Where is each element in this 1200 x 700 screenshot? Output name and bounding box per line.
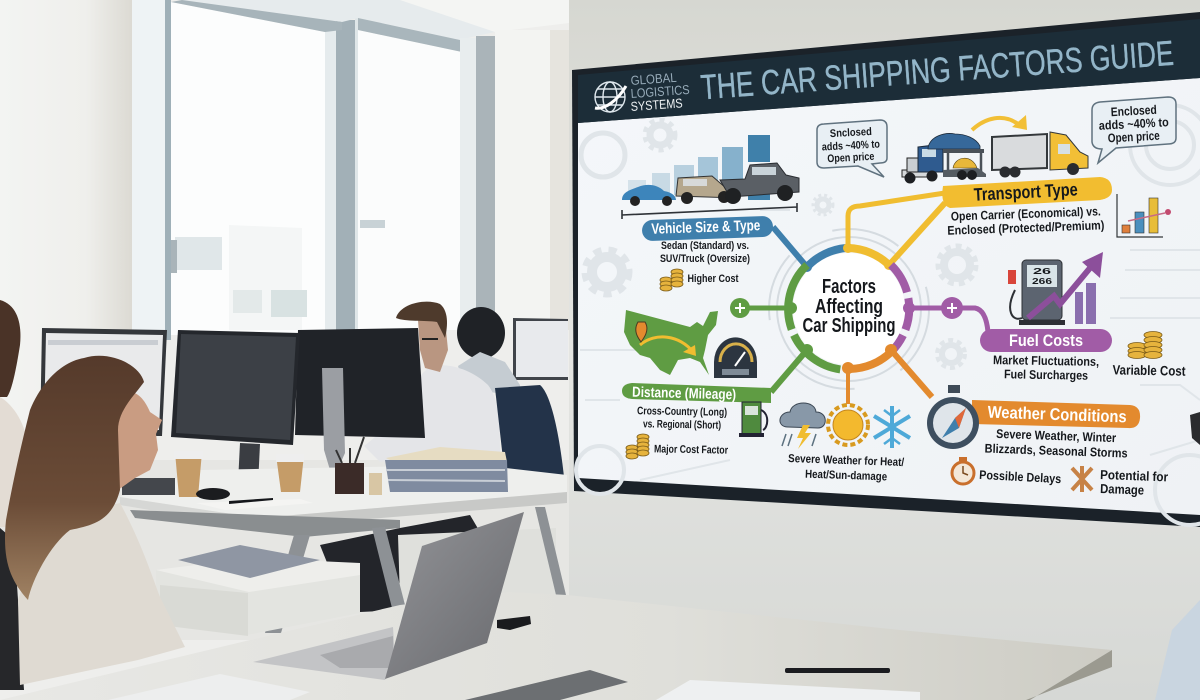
weather icons: Severe Weather for Heat/ xyxy=(788,453,905,469)
coffee cup 2 xyxy=(276,454,304,492)
stack of files xyxy=(385,447,508,492)
hub title xyxy=(802,276,896,337)
icon: speedometer xyxy=(714,337,757,378)
connector: orange xyxy=(842,344,932,404)
header logo: GLOBAL xyxy=(630,70,677,88)
weather conditions panel xyxy=(972,400,1140,460)
icon: globe logo xyxy=(595,82,626,112)
fuel costs panel: Variable Cost xyxy=(1112,362,1186,379)
laptop xyxy=(253,512,524,680)
header band xyxy=(578,19,1200,123)
speech bubble: right xyxy=(1092,97,1176,163)
plus node: green xyxy=(730,298,750,318)
possible delays: Possible Delays xyxy=(979,468,1062,486)
connector: purple xyxy=(891,265,988,352)
icon: beige SUV xyxy=(676,176,737,204)
speech bubble: right: Enclosed xyxy=(1110,103,1157,119)
icon: compass stopwatch xyxy=(927,385,979,449)
paper and pen xyxy=(196,498,313,510)
icon: coins xyxy=(1128,332,1162,358)
pen on desk xyxy=(785,668,890,673)
hub title: Car Shipping xyxy=(802,315,896,337)
central monitor left xyxy=(171,330,300,485)
fuel costs panel: Fuel Costs xyxy=(1009,331,1083,350)
central monitor right xyxy=(295,328,425,480)
transport type panel: Transport Type xyxy=(973,179,1078,205)
weather icons: Heat/Sun-damage xyxy=(805,469,887,483)
connector: green xyxy=(740,265,846,392)
icon: fuel pump and rising arrow xyxy=(1008,252,1103,325)
right back monitor xyxy=(513,318,568,380)
connector: blue xyxy=(773,227,846,272)
face xyxy=(118,392,162,490)
wall TV screen xyxy=(572,12,1200,527)
speech bubble: right: adds ~40% to xyxy=(1098,115,1169,133)
desk xyxy=(120,465,567,633)
icon: car carrier truck xyxy=(902,134,986,184)
speech bubble: right: Open price xyxy=(1107,129,1160,145)
display xyxy=(578,78,1200,515)
hub title: Factors xyxy=(822,276,876,298)
blouse xyxy=(18,503,185,685)
fuel costs panel xyxy=(980,329,1186,383)
icon: coins xyxy=(660,269,683,291)
decorative rings xyxy=(769,229,929,389)
icon: green fuel pump xyxy=(739,402,767,437)
vehicle size bars xyxy=(628,135,770,200)
header logo: LOGISTICS xyxy=(630,82,690,101)
header logo xyxy=(595,70,690,114)
mouse xyxy=(196,488,230,500)
foreground desk xyxy=(0,592,1112,700)
small bar chart xyxy=(1117,194,1171,237)
header logo: SYSTEMS xyxy=(630,95,683,114)
icon: fuel pump and rising arrow: 26 xyxy=(1033,266,1051,276)
left woman xyxy=(0,300,28,527)
icon: storm cloud xyxy=(780,403,825,449)
fuel costs panel: Market Fluctuations, xyxy=(993,353,1099,369)
chair xyxy=(0,528,24,690)
coffee cup 1 xyxy=(174,451,203,497)
small cup xyxy=(369,473,382,495)
foreground woman xyxy=(5,356,185,685)
back office scene xyxy=(0,302,569,640)
pen cup xyxy=(335,437,364,494)
weather conditions panel: Blizzards, Seasonal Storms xyxy=(984,442,1128,460)
icon: damage cross xyxy=(1072,466,1092,492)
man at desk xyxy=(364,302,500,462)
transport type panel: Open Carrier (Economical) vs. xyxy=(951,204,1101,224)
potential for damage xyxy=(1100,467,1168,498)
icon: pickup truck xyxy=(720,163,799,204)
transport type panel: Enclosed (Protected/Premium) xyxy=(947,218,1105,238)
vehicle size panel xyxy=(642,216,773,291)
icon: US map with route xyxy=(624,310,718,375)
centre hub xyxy=(740,193,988,404)
icon: fuel pump and rising arrow: 266 xyxy=(1032,276,1052,286)
pill xyxy=(642,216,773,241)
long hair xyxy=(5,356,144,600)
vehicle size panel: SUV/Truck (Oversize) xyxy=(660,253,750,265)
weather icons xyxy=(780,403,910,483)
right under-desk cabinet xyxy=(398,528,556,600)
hub title: Affecting xyxy=(815,296,883,318)
filing cabinet xyxy=(156,545,360,636)
speech bubble: left: adds ~40% to xyxy=(822,138,880,154)
icon: blue sedan xyxy=(622,185,676,206)
person at right edge xyxy=(1155,412,1200,700)
bezel xyxy=(572,12,1200,527)
distance panel: Distance (Mileage) xyxy=(632,385,736,403)
weather conditions panel: Weather Conditions xyxy=(987,403,1127,426)
connector: yellow xyxy=(843,193,945,270)
icon: enclosed box truck xyxy=(992,132,1088,178)
vehicle size panel: Sedan (Standard) vs. xyxy=(661,240,749,252)
icon: sun xyxy=(828,405,868,445)
icon: snowflake xyxy=(874,406,910,448)
weather conditions panel: Severe Weather, Winter xyxy=(996,427,1116,445)
potential for damage: Damage xyxy=(1100,481,1144,498)
background gears xyxy=(576,105,1200,525)
dark seated legs xyxy=(320,515,480,612)
distance panel: Major Cost Factor xyxy=(654,443,729,457)
distance panel: vs. Regional (Short) xyxy=(643,418,721,432)
vehicle size panel: Vehicle Size & Type xyxy=(651,217,761,238)
speech bubble: left xyxy=(817,120,887,177)
icon: coins xyxy=(626,434,649,459)
plus node: purple xyxy=(941,297,963,319)
phone xyxy=(497,616,531,630)
vehicle size panel: Higher Cost xyxy=(688,273,739,285)
distance panel xyxy=(622,383,771,459)
speech bubble: left: Snclosed xyxy=(830,126,872,140)
distance panel: Cross-Country (Long) xyxy=(637,405,727,419)
fuel costs panel: Fuel Surcharges xyxy=(1004,367,1088,383)
speech bubble: left: Open price xyxy=(827,151,875,165)
keyboard xyxy=(122,478,175,495)
arrow: enclosed upgrade xyxy=(972,115,1027,130)
transport type panel xyxy=(942,177,1112,238)
jacket on chair xyxy=(495,385,564,477)
potential for damage: Potential for xyxy=(1100,467,1168,484)
person in back xyxy=(457,307,520,395)
desk papers xyxy=(108,670,920,700)
icon: delay stopwatch xyxy=(952,457,974,484)
ruler xyxy=(622,203,797,219)
left back monitor xyxy=(40,328,167,436)
